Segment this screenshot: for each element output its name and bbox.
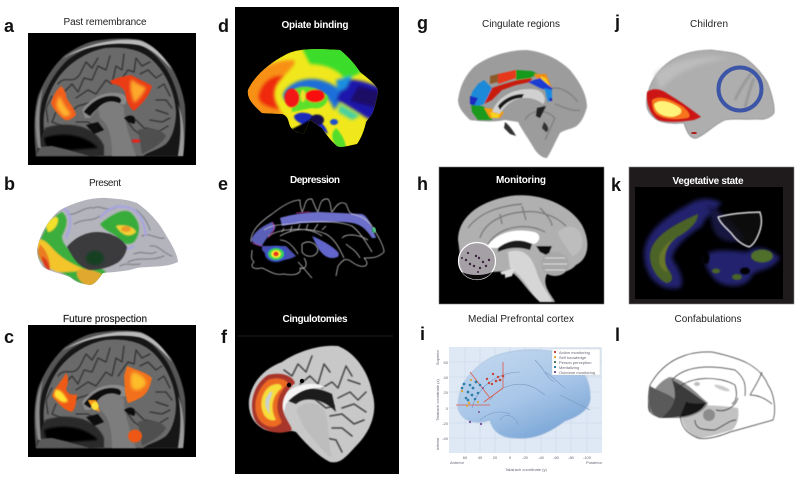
axis labels: 20 (444, 390, 449, 395)
axis labels: Inferior (435, 437, 440, 450)
axis labels: -100 (583, 455, 592, 460)
inflated brain surface (647, 50, 774, 138)
opiate binding map (248, 49, 378, 147)
axis labels: -40 (538, 455, 545, 460)
title: medial prefrontal cortex: Medial Prefrontal cortex (468, 314, 574, 325)
title: opiate binding: Opiate binding (282, 20, 348, 31)
axis labels: -80 (568, 455, 575, 460)
panel letter a: a (4, 16, 15, 36)
axis labels: Talairach coordinate (z) (435, 379, 440, 421)
panel letter b: b (4, 174, 15, 194)
column panel d-f black background (235, 7, 399, 474)
axis labels: Talairach coordinate (y) (505, 467, 547, 472)
panel l: confabulations (615, 314, 775, 439)
lesion overlays (648, 377, 738, 438)
panel d: opiate binding (218, 18, 378, 147)
title: cingulotomies: Cingulotomies (282, 314, 348, 325)
panel letter e: e (218, 174, 228, 194)
white outlined region (718, 212, 762, 247)
brain outline sections (648, 352, 775, 439)
magnified circle with dots (458, 242, 496, 280)
black background (439, 167, 604, 304)
metabolism map (644, 199, 780, 289)
axis labels: 0 (509, 455, 512, 460)
axis labels: 40 (444, 375, 449, 380)
grid lines (449, 347, 602, 453)
data points (461, 373, 504, 425)
blue circle (718, 68, 762, 110)
axis labels: -60 (553, 455, 560, 460)
panel b: present (5, 176, 178, 285)
brain outline and cingulate map (251, 199, 384, 278)
panel letter d: d (218, 16, 229, 36)
axis labels: Posterior (586, 460, 603, 465)
title: children: Children (690, 19, 728, 30)
legend: Mentalizing (559, 365, 579, 370)
activation blobs (51, 75, 152, 143)
panel letter k: k (611, 175, 622, 195)
panel letter i: i (420, 324, 425, 344)
axis labels: 60 (463, 455, 468, 460)
activation blobs (52, 366, 152, 442)
panel letter l: l (615, 325, 620, 345)
MRI head slice (28, 325, 196, 457)
panel a: past remembrance (4, 16, 196, 165)
panel letter j: j (614, 12, 620, 32)
colored cingulate parcels (470, 70, 552, 120)
title: confabulations: Confabulations (674, 314, 742, 325)
brain slice (249, 346, 374, 462)
legend: Self knowledge (559, 355, 587, 360)
legend: Action monitoring (559, 350, 590, 355)
background (629, 167, 794, 304)
panel letter g: g (417, 13, 428, 33)
legend: Person perception (559, 360, 591, 365)
title: vegetative state: Vegetative state (672, 176, 744, 187)
panel f: cingulotomies (221, 314, 393, 462)
panel j: children (614, 12, 774, 138)
panel k: vegetative state (611, 167, 794, 304)
activation blob (647, 89, 701, 134)
panel letter h: h (417, 174, 428, 194)
axis labels: 40 (478, 455, 483, 460)
blue brain shape (458, 350, 590, 438)
title: cingulate regions: Cingulate regions (482, 19, 560, 30)
legend (552, 349, 600, 375)
panel g: cingulate regions (417, 13, 587, 158)
title: present: Present (89, 178, 121, 189)
title: past remembrance: Past remembrance (64, 17, 147, 28)
panel letter c: c (4, 327, 14, 347)
axis labels: 60 (444, 360, 449, 365)
gray brain (458, 50, 587, 158)
MRI head slice (28, 33, 196, 165)
axis labels: Anterior (450, 460, 465, 465)
cortical surface brain (37, 198, 178, 285)
axis labels: 0 (446, 406, 449, 411)
axis labels (435, 349, 603, 472)
axis labels: Superior (435, 349, 440, 365)
corpus callosum and ventricle (492, 89, 548, 136)
axis labels: -20 (522, 455, 529, 460)
panel h: monitoring (417, 167, 604, 304)
title: monitoring: Monitoring (496, 175, 546, 186)
axis labels: 20 (493, 455, 498, 460)
axis labels: -40 (442, 436, 449, 441)
axis labels: -20 (442, 421, 449, 426)
gray brain (457, 195, 587, 302)
panel i: medial prefrontal cortex chart (420, 314, 603, 472)
panel letter f: f (221, 327, 228, 347)
title: future prospection: Future prospection (63, 314, 147, 325)
title: depression: Depression (290, 175, 340, 186)
red reference lines (456, 362, 503, 405)
brain outlines (472, 360, 590, 425)
plot background (449, 347, 602, 453)
legend: Outcome monitoring (559, 370, 595, 375)
panel c: future prospection (4, 314, 196, 457)
panel e: depression (218, 174, 384, 278)
